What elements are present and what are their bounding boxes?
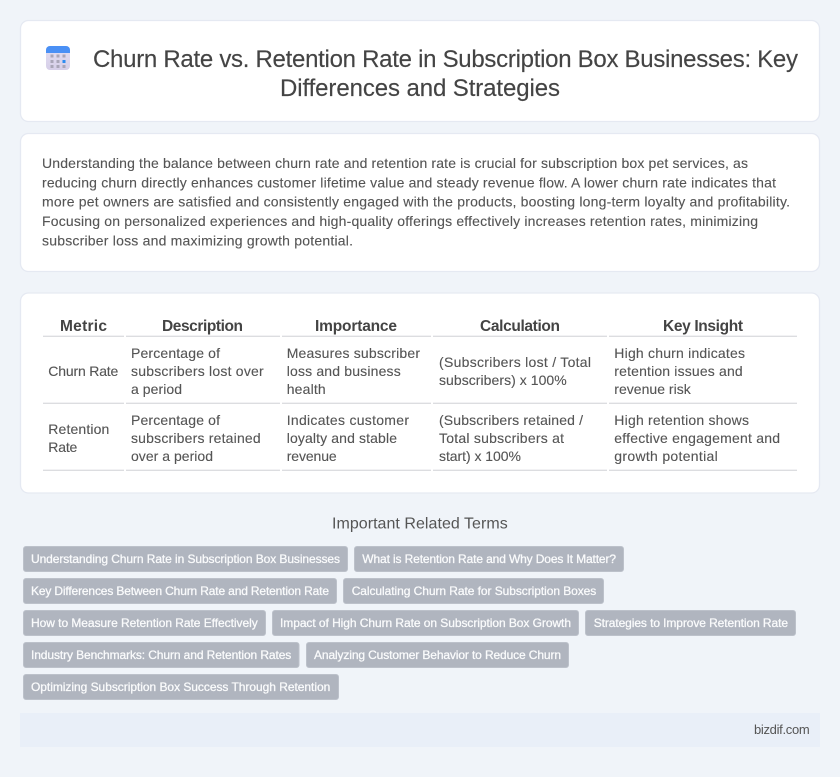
table row: churn rate: loss and business (287, 363, 401, 379)
tag: How to Measure Retention Rate Effectively (31, 616, 258, 630)
table row: churn rate: subscribers) x 100% (439, 372, 567, 388)
table header row: Calculation (480, 318, 560, 335)
table row: churn rate: (Subscribers lost / Total (439, 354, 591, 370)
table header row: Description (162, 318, 243, 335)
panel: comparison table (20, 293, 820, 493)
table row: churn rate (48, 345, 745, 397)
table row: retention rate: loyalty and stable (287, 430, 397, 446)
tag: Impact of High Churn Rate on Subscription Box Growth (280, 616, 571, 630)
table row: churn rate: health (287, 381, 326, 397)
panel: introduction text (20, 134, 820, 272)
table row: churn rate: retention issues and (614, 363, 743, 379)
text block: introduction paragraph (42, 155, 790, 248)
table row: retention rate: effective engagement and (614, 430, 780, 446)
title: Churn Rate vs. Retention Rate in Subscription Box Businesses: Key (93, 46, 798, 73)
tags: related terms (24, 546, 796, 700)
tag (24, 642, 299, 668)
tag (24, 546, 348, 572)
table row: retention rate: start) x 100% (439, 448, 521, 464)
tag (24, 674, 338, 700)
tag (272, 610, 578, 636)
table row: retention rate: over a period (131, 448, 213, 464)
table row: retention rate: Retention (48, 421, 109, 437)
table row: churn rate: Churn Rate (48, 363, 119, 379)
table row: retention rate: Percentage of (131, 412, 220, 428)
tag: Analyzing Customer Behavior to Reduce Churn (314, 648, 561, 662)
tag: Calculating Churn Rate for Subscription Boxes (352, 584, 596, 598)
table row: churn rate: Percentage of (131, 345, 220, 361)
tag: What is Retention Rate and Why Does It Matter? (362, 552, 616, 566)
table row: retention rate: (Subscribers retained / (439, 412, 583, 428)
text block: introduction paragraph: more pet owners are satisfied and consistently engaged with the products, boosting long-term loyalty and profitability. (42, 194, 790, 210)
panel: title header (20, 20, 820, 122)
tag (344, 578, 604, 604)
icon: calendar (46, 46, 70, 70)
footer bar: bizdif.com (754, 722, 810, 737)
tag (306, 642, 568, 668)
table row: churn rate: subscribers lost over (131, 363, 264, 379)
table row: retention rate: Total subscribers at (439, 430, 564, 446)
table row: retention rate: High retention shows (614, 412, 749, 428)
tag: Optimizing Subscription Box Success Through Retention (31, 680, 330, 694)
title (93, 46, 798, 102)
table row: retention rate: revenue (287, 448, 337, 464)
heading: important related terms: Important Related Terms (332, 516, 508, 533)
tag: Key Differences Between Churn Rate and Retention Rate (31, 584, 329, 598)
text block: introduction paragraph: subscriber loss and maximizing growth potential. (42, 232, 353, 248)
table row: churn rate: revenue risk (614, 381, 692, 397)
table header row (60, 318, 743, 335)
table row: churn rate: Measures subscriber (287, 345, 420, 361)
table row: retention rate: subscribers retained (131, 430, 261, 446)
tag: Understanding Churn Rate in Subscription Box Businesses (31, 552, 340, 566)
table row: churn rate: High churn indicates (614, 345, 745, 361)
title: Differences and Strategies (280, 75, 560, 102)
table row: retention rate: Indicates customer (287, 412, 409, 428)
table row: retention rate: Rate (48, 439, 78, 455)
tag (354, 546, 624, 572)
text block: introduction paragraph: Understanding the balance between churn rate and retention rate is crucial for subscription box pet services, as (42, 155, 748, 171)
tag (24, 578, 336, 604)
tag (24, 610, 266, 636)
text block: introduction paragraph: reducing churn directly enhances customer lifetime value and steady revenue flow. A lower churn rate indicates that (42, 174, 776, 190)
text block: introduction paragraph: Focusing on personalized experiences and high-quality offerings effectively increases retention rates, minimizing (42, 213, 758, 229)
tag (586, 610, 796, 636)
tag: Industry Benchmarks: Churn and Retention Rates (31, 648, 291, 662)
table header row: Key Insight (663, 318, 743, 335)
table row: retention rate (48, 412, 780, 464)
table header row: Importance (315, 318, 397, 335)
table row: retention rate: growth potential (614, 448, 718, 464)
tag: Strategies to Improve Retention Rate (594, 616, 788, 630)
footer bar (20, 713, 820, 747)
table row: churn rate: a period (131, 381, 182, 397)
table header row: Metric (60, 318, 107, 335)
